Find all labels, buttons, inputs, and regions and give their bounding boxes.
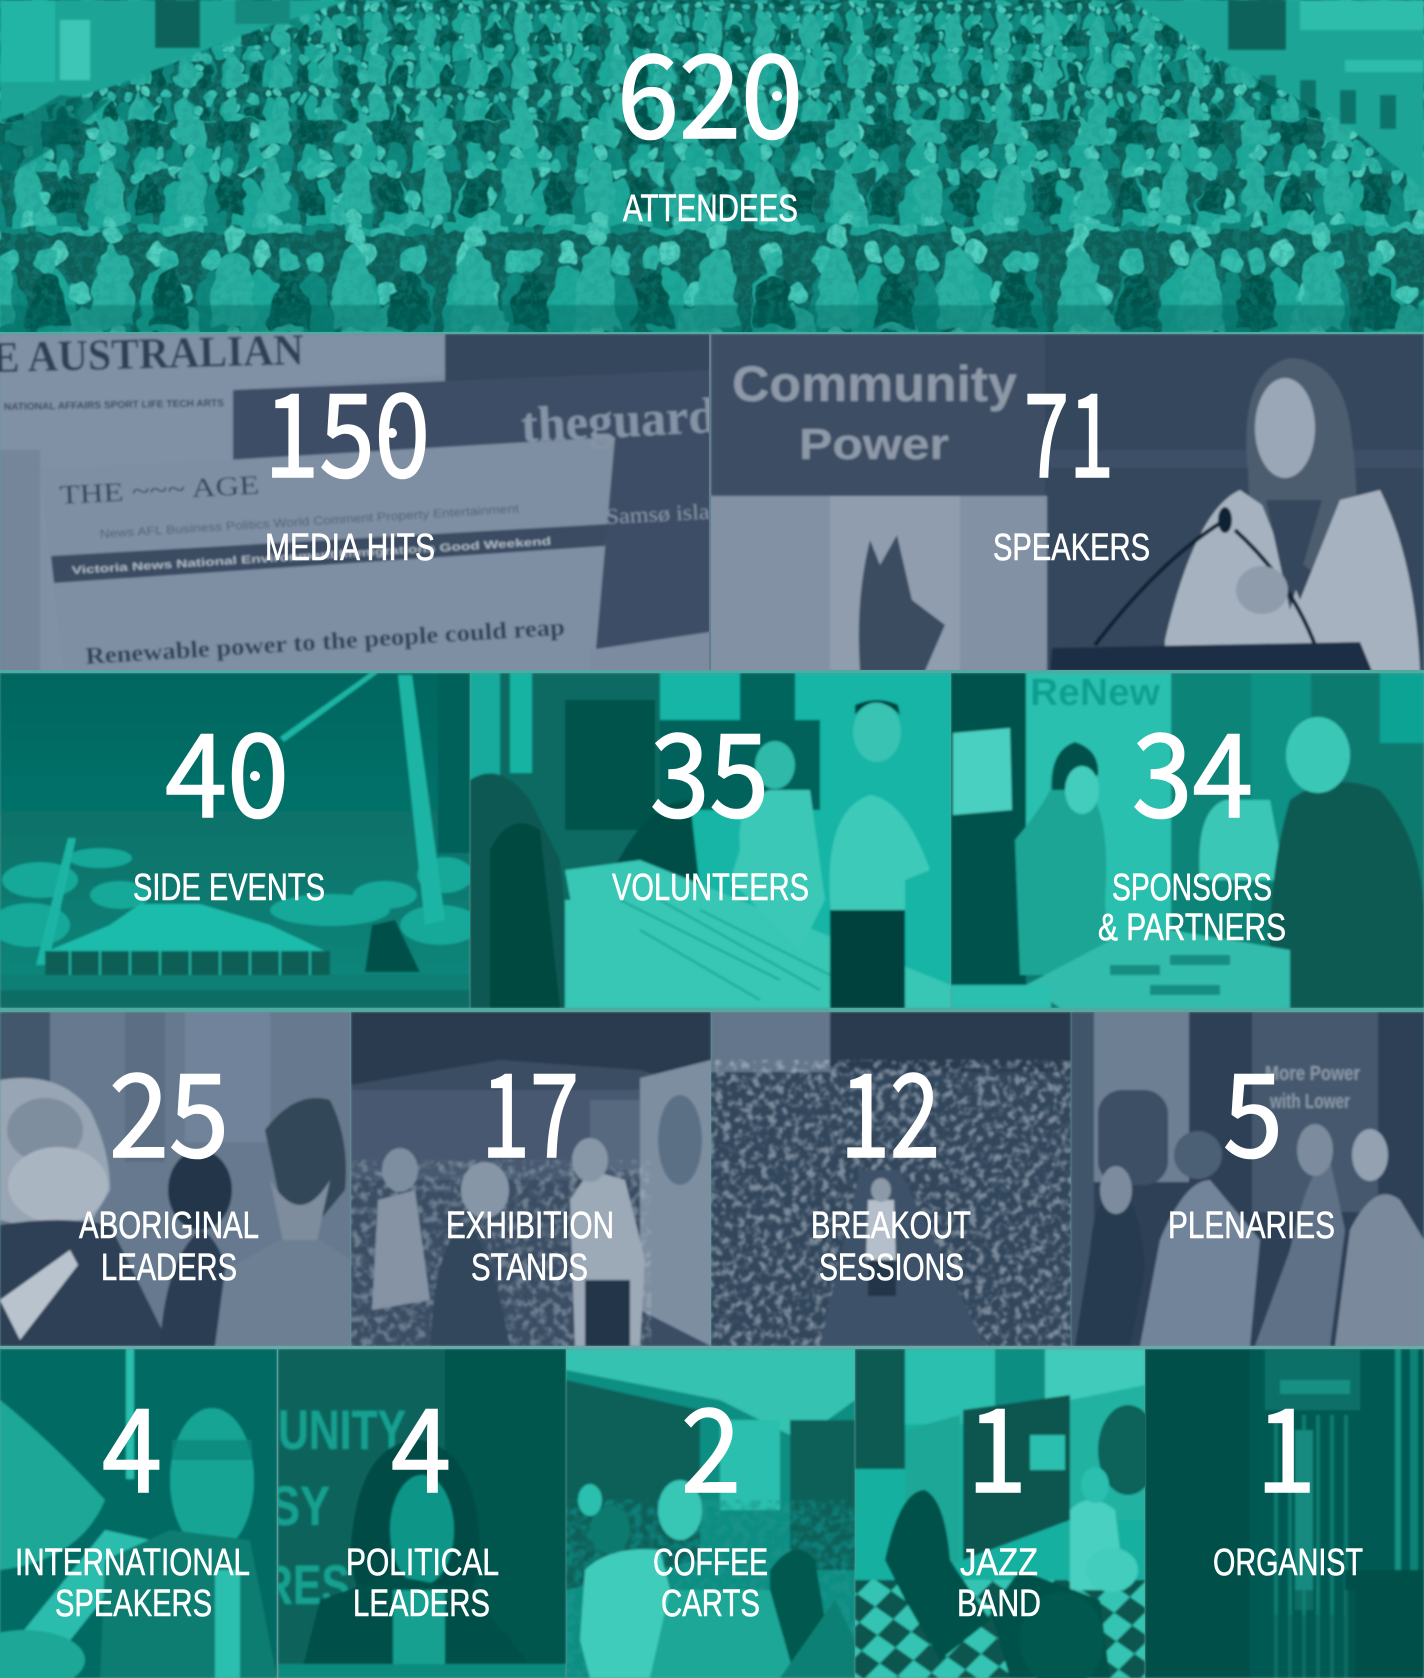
number: 12: 12 [840,1023,940,1191]
number: 4: 4 [102,1358,162,1526]
photo: sponsors at exhibition stand [951,672,1424,1008]
photo: breakout session audience [711,1012,1071,1346]
number: 17: 17 [481,1023,579,1191]
label: sponsors and partners: SPONSORS [1112,867,1272,909]
photo: plenary panel on stage: More Power [1265,1063,1360,1085]
number: 1: 1 [1256,1358,1316,1526]
photo: speaker at podium: Community [732,356,1017,412]
label: coffee carts: COFFEE [653,1542,768,1584]
panel: breakout sessions [711,1012,1071,1346]
panel: speakers [711,334,1424,671]
label: breakout sessions: SESSIONS [819,1247,964,1289]
label: breakout sessions [811,1205,971,1289]
photo: political leader at lectern: UNITY [278,1398,406,1461]
panel: sponsors and partners [951,672,1424,1008]
label: sponsors and partners: & PARTNERS [1098,907,1286,949]
label: political leaders: LEADERS [353,1583,490,1625]
panel: media hits [0,325,784,671]
panel: coffee carts [566,1349,855,1678]
label: international speakers [15,1542,250,1625]
panel: exhibition stands [351,1012,711,1346]
photo: speaker at podium [711,334,1424,670]
panel: organist [1145,1349,1424,1678]
panel: political leaders [262,1349,566,1678]
panel: attendees [0,0,1424,355]
label: coffee carts: CARTS [661,1583,760,1625]
label: international speakers: INTERNATIONAL [15,1542,250,1584]
photo: marquee and wind turbine [0,673,470,1008]
label: attendees: ATTENDEES [623,188,798,230]
label: plenaries: PLENARIES [1168,1205,1335,1247]
photo: speaker at podium: Power [799,420,949,469]
number: 5: 5 [1223,1023,1283,1191]
panel: jazz band [855,1349,1158,1678]
number: 1: 1 [967,1358,1027,1526]
label: aboriginal leaders: LEADERS [101,1247,237,1289]
number: 35: 35 [650,683,769,851]
panel: international speakers [0,1349,277,1678]
panel: volunteers [470,673,951,1008]
label: aboriginal leaders: ABORIGINAL [79,1205,259,1247]
photo: pipe organ [1145,1349,1424,1678]
number: 71: 71 [1024,343,1114,511]
number: 620: 620 [617,4,803,172]
label: side events: SIDE EVENTS [133,867,325,909]
label: exhibition stands [446,1205,614,1289]
label: jazz band: BAND [957,1583,1041,1625]
photo: newspaper clippings [0,325,784,670]
panel: aboriginal leaders [0,1012,351,1346]
photo: political leader at lectern [262,1349,566,1678]
photo: plenary panel on stage [1071,1012,1424,1346]
number: 2: 2 [681,1358,741,1526]
photo: newspaper clippings: News AFL Business Politics World Comment Property Entertainment [99,501,520,541]
photo: newspaper clippings: THE ~~~ AGE [59,470,260,510]
photo: sponsors at exhibition stand: ReNew [1030,672,1160,714]
label: speakers: SPEAKERS [993,527,1150,569]
label: jazz band: JAZZ [960,1542,1038,1584]
label: jazz band [957,1542,1041,1625]
number: 34: 34 [1132,683,1253,851]
label: coffee carts [653,1542,768,1625]
label: organist: ORGANIST [1213,1542,1363,1584]
photo: crowd of conference attendees [0,0,1424,332]
number: 150: 150 [264,343,430,511]
label: political leaders: POLITICAL [346,1542,499,1584]
photo: newspaper clippings: Victoria News National Environment Immigrations Good Weekend [71,536,551,577]
photo: jazz band on checkered floor [855,1349,1145,1678]
label: international speakers: SPEAKERS [55,1583,212,1625]
label: political leaders [346,1542,499,1625]
photo: newspaper clippings: Samsø isla [605,499,710,529]
number: 4: 4 [391,1358,451,1526]
photo: two Aboriginal leaders [0,1012,351,1346]
photo: newspaper clippings: NATIONAL AFFAIRS SPORT LIFE TECH ARTS [4,398,224,413]
label: aboriginal leaders [79,1205,259,1289]
photo: coffee cart crowd [566,1349,855,1678]
number: 25: 25 [109,1023,229,1191]
photo: exhibition hall [351,1012,711,1346]
label: volunteers: VOLUNTEERS [612,867,809,909]
label: breakout sessions: BREAKOUT [811,1205,971,1247]
photo: political leader at lectern: RES [262,1553,350,1616]
label: sponsors and partners [1098,867,1286,949]
label: media hits: MEDIA HITS [265,527,435,569]
photo: political leader at lectern: SY [270,1474,330,1537]
photo: volunteers at registration table [470,673,951,1008]
number: 40: 40 [165,683,289,851]
photo: newspaper clippings: Renewable power to the people could reap [85,615,565,670]
panel: side events [0,673,480,1008]
photo: international speaker portrait [0,1349,277,1678]
label: exhibition stands: STANDS [471,1247,588,1289]
photo: newspaper clippings: theguardian [520,383,784,453]
photo: plenary panel on stage: with Lower [1269,1091,1350,1113]
label: exhibition stands: EXHIBITION [446,1205,614,1247]
panel: plenaries [1071,1012,1424,1346]
